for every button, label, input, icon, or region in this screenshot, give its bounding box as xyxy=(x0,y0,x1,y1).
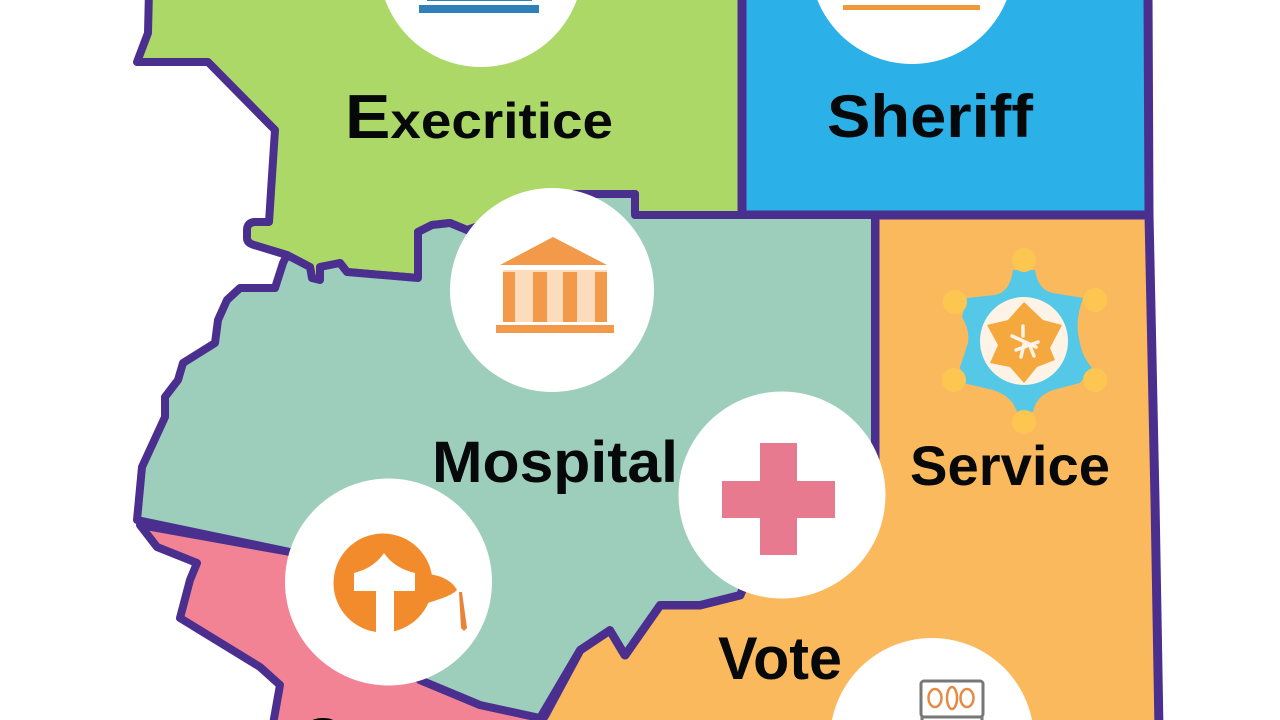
label: Execritice: Execritice xyxy=(345,83,613,152)
circle badge: hospital cross icon xyxy=(678,392,886,598)
label: Service: Service xyxy=(910,434,1110,497)
circle badge: executive building xyxy=(379,0,583,67)
region: pink xyxy=(140,525,550,720)
region: blue Sheriff xyxy=(742,0,1149,215)
label: Mospital: Mospital xyxy=(432,430,678,495)
circle badge: bank building icon xyxy=(450,188,654,392)
region: green Execritice xyxy=(137,0,742,280)
label: Sheriff: Sheriff xyxy=(827,83,1034,150)
vote ballot icon circle xyxy=(830,638,1034,720)
circle badge: graduation icon xyxy=(285,478,492,686)
circle badge: sheriff top xyxy=(810,0,1014,64)
region: teal Mospital xyxy=(137,194,875,718)
region: orange Service and Vote xyxy=(535,215,1159,720)
label: Vote: Vote xyxy=(718,625,842,692)
sheriff badge icon xyxy=(942,248,1107,434)
